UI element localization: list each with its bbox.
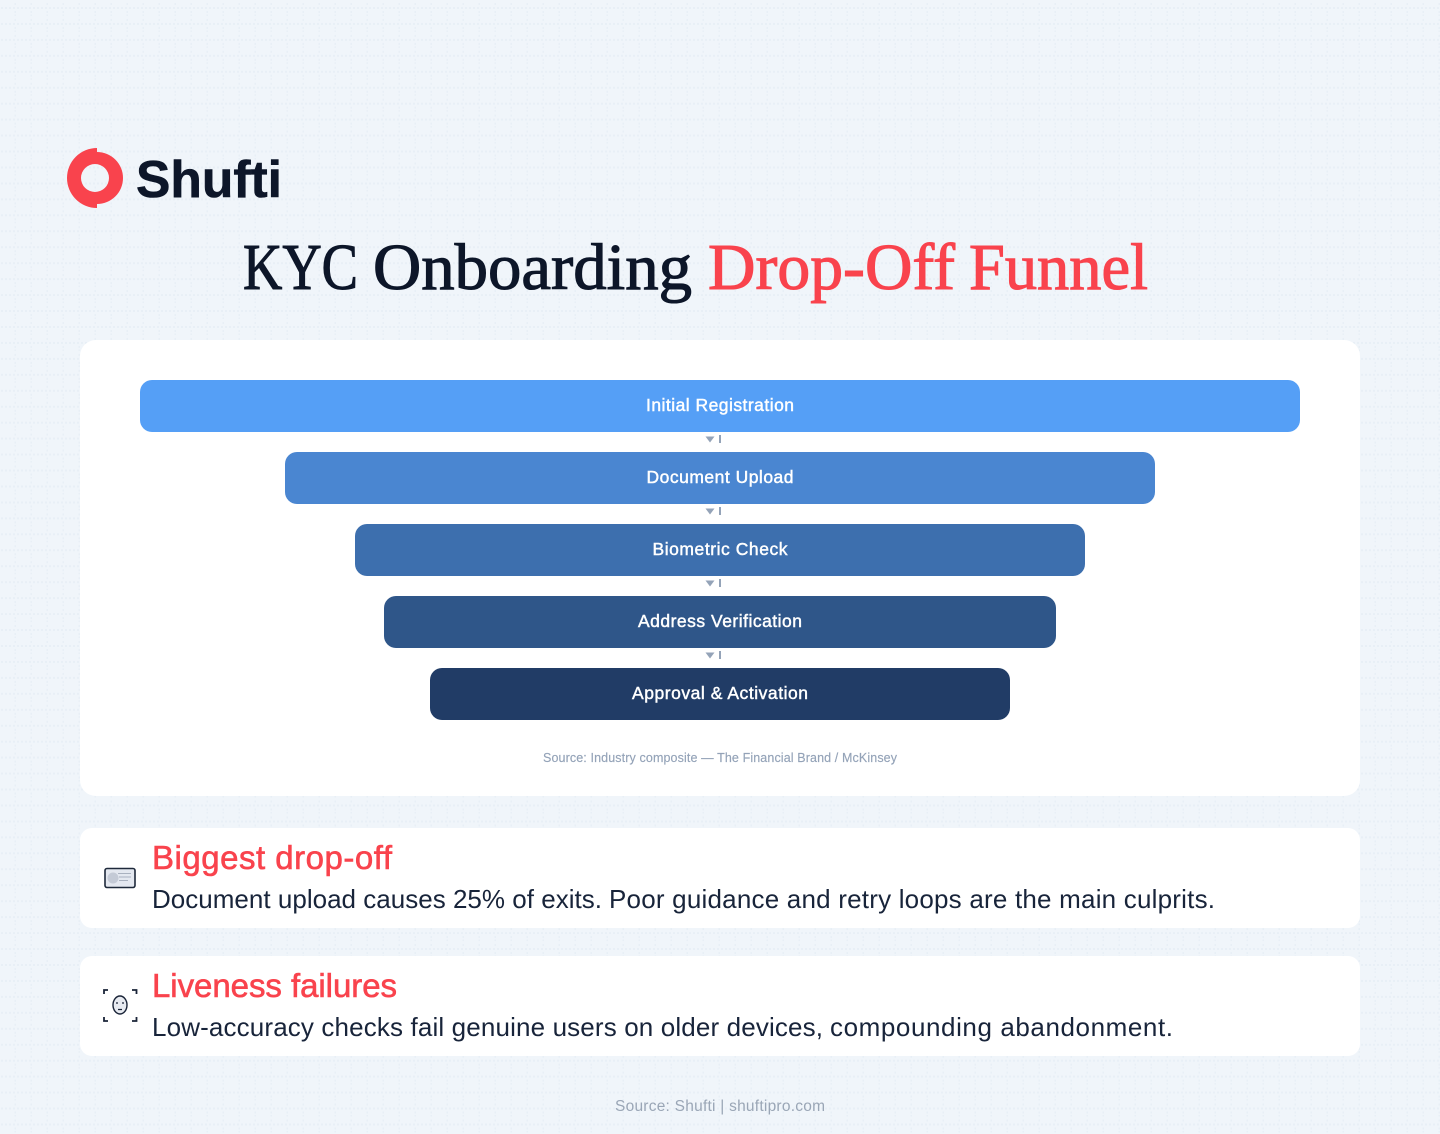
icon: logo ring bbox=[67, 148, 123, 208]
arrow 3 bbox=[706, 579, 721, 587]
icon: ID document bbox=[105, 868, 135, 888]
panel: funnel chart bbox=[80, 340, 1360, 796]
funnel stage: Address Verification: Address Verification bbox=[638, 611, 802, 631]
title bbox=[243, 231, 1148, 304]
body: liveness failures bbox=[152, 1012, 1173, 1042]
funnel stage: Address Verification bbox=[384, 596, 1056, 648]
funnel stage: Approval & Activation bbox=[430, 668, 1010, 720]
funnel stage: Initial Registration bbox=[140, 380, 1300, 432]
body: biggest drop-off: Document upload causes 25% of exits. bbox=[152, 884, 602, 914]
arrow 2 bbox=[706, 507, 721, 515]
logo: Shufti bbox=[67, 148, 282, 209]
funnel stage: Document Upload: Document Upload bbox=[646, 467, 794, 487]
title: Drop-Off bbox=[708, 231, 955, 304]
footer source: Source: Shufti | shuftipro.com bbox=[615, 1098, 825, 1115]
body: biggest drop-off bbox=[152, 884, 1215, 914]
body: liveness failures: Low-accuracy checks fail genuine users on older devices, bbox=[152, 1012, 823, 1042]
funnel stage: Biometric Check bbox=[355, 524, 1085, 576]
funnel stage: Document Upload bbox=[285, 452, 1155, 504]
panel: biggest drop-off bbox=[80, 828, 1360, 928]
body: liveness failures: compounding abandonment. bbox=[830, 1012, 1173, 1042]
heading: liveness failures: Liveness failures bbox=[152, 967, 397, 1004]
icon: face scan bbox=[104, 990, 136, 1021]
arrow 4 bbox=[706, 651, 721, 659]
logo wordmark: Shufti bbox=[136, 151, 282, 209]
panel: liveness failures bbox=[80, 956, 1360, 1056]
funnel stage: Biometric Check: Biometric Check bbox=[652, 539, 788, 559]
funnel stage: Approval & Activation: Approval & Activation bbox=[632, 683, 808, 703]
title: Onboarding bbox=[373, 231, 692, 304]
body: biggest drop-off: Poor guidance and retry loops are the main culprits. bbox=[609, 884, 1215, 914]
title: Funnel bbox=[969, 231, 1148, 304]
heading: biggest drop-off: Biggest drop-off bbox=[152, 839, 393, 876]
arrow 1 bbox=[706, 435, 721, 443]
funnel source note: Source: Industry composite — The Financial Brand / McKinsey bbox=[543, 751, 898, 765]
title: KYC bbox=[243, 231, 358, 304]
funnel stage: Initial Registration: Initial Registration bbox=[646, 395, 794, 415]
